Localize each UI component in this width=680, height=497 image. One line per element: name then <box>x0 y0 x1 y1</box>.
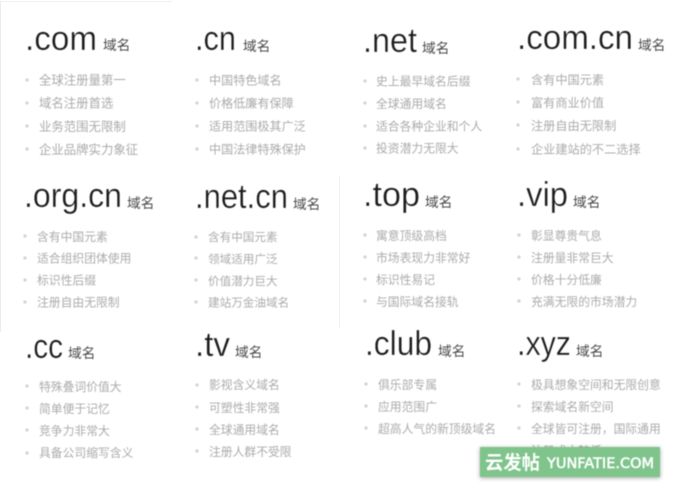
label: 域名: 域名 <box>293 197 320 212</box>
list: .com.cn features: 含有中国元素 <box>531 72 604 87</box>
heading: .xyz: .xyz <box>517 325 571 363</box>
list: .cc features: 简单便于记忆 <box>39 402 110 416</box>
list: .com.cn features: 注册自由无限制 <box>531 118 616 133</box>
panel: .cc <box>25 328 134 460</box>
label: 域名: 域名 <box>425 195 452 210</box>
heading: .tv: .tv <box>195 326 231 364</box>
panel: .org.cn <box>23 177 154 310</box>
heading: .org.cn: .org.cn <box>24 177 122 215</box>
list: .vip features: 彰显尊贵气息 <box>531 229 602 243</box>
list: .net.cn features: 价值潜力巨大 <box>208 274 278 288</box>
list: .top features: 标识性易记 <box>376 273 435 287</box>
heading: .net.cn: .net.cn <box>195 178 288 216</box>
list: .tv features: 全球通用域名 <box>209 423 280 437</box>
list: .com.cn features: 富有商业价值 <box>531 95 604 110</box>
panel: .net <box>363 22 482 156</box>
watermark badge <box>480 447 660 477</box>
list: .xyz features <box>517 378 661 458</box>
list: .xyz features: 注册成本较低 <box>531 444 602 458</box>
list: .tv features: 可塑性非常强 <box>209 401 280 415</box>
label: 域名: 域名 <box>438 344 465 359</box>
heading: .com.cn: .com.cn <box>517 19 633 57</box>
heading: .net: .net <box>363 22 417 60</box>
list: .top features <box>363 229 471 309</box>
watermark badge: 云发帖 <box>485 448 540 475</box>
list: .org.cn features: 含有中国元素 <box>37 230 108 244</box>
heading: .cc: .cc <box>25 328 63 366</box>
list: .com features: 全球注册量第一 <box>39 72 126 88</box>
list: .com features <box>25 72 138 157</box>
list: .club features: 应用范围广 <box>378 400 437 414</box>
panel: .cn <box>195 20 306 156</box>
list: .net.cn features: 建站万金油域名 <box>208 296 289 310</box>
list: .vip features: 价格十分低廉 <box>531 273 602 287</box>
list: .com features: 企业品牌实力象征 <box>39 142 138 157</box>
panel: .club <box>364 325 496 436</box>
list: .club features: 俱乐部专属 <box>378 378 437 392</box>
list: .vip features: 充满无限的市场潜力 <box>531 295 637 309</box>
list: .org.cn features: 适合组织团体使用 <box>37 252 131 266</box>
list: .net features: 全球通用域名 <box>376 97 447 111</box>
list: .org.cn features: 标识性后缀 <box>37 274 96 288</box>
list: .top features: 市场表现力非常好 <box>376 251 471 265</box>
panel: .com <box>25 20 138 157</box>
list: .top features: 寓意顶级高档 <box>376 229 447 243</box>
list: .cn features: 中国法律特殊保护 <box>209 142 306 156</box>
heading: .club: .club <box>365 325 432 363</box>
list: .net.cn features: 领域适用广泛 <box>208 253 278 266</box>
list: .cn features: 价格低廉有保障 <box>209 96 294 110</box>
list: .com features: 域名注册首选 <box>39 96 113 110</box>
label: 域名: 域名 <box>573 195 600 210</box>
list: .cc features: 具备公司缩写含义 <box>39 446 134 460</box>
heading: .vip: .vip <box>517 176 568 214</box>
list: .org.cn features: 注册自由无限制 <box>37 296 120 310</box>
panel: .vip <box>517 176 637 309</box>
list: .vip features: 注册量非常巨大 <box>531 251 614 265</box>
list: .net.cn features: 含有中国元素 <box>208 230 278 244</box>
list: .com.cn features <box>516 72 641 156</box>
list: .net features: 适合各种企业和个人 <box>376 120 482 134</box>
list: .club features: 超高人气的新顶级域名 <box>378 422 496 436</box>
panel: .tv <box>195 326 292 459</box>
label: 域名: 域名 <box>68 346 95 361</box>
panel: .xyz <box>517 325 661 458</box>
list: .org.cn features <box>23 230 131 310</box>
list: .cn features: 适用范围极其广泛 <box>209 120 306 134</box>
label: 域名: 域名 <box>103 38 130 53</box>
list: .net features: 史上最早域名后缀 <box>376 74 471 88</box>
list: .cc features: 特殊叠词价值大 <box>39 380 122 394</box>
list: .cc features: 竞争力非常大 <box>39 424 110 438</box>
list: .cn features: 中国特色域名 <box>209 72 282 88</box>
panel: .net.cn <box>194 178 320 310</box>
heading: .cn: .cn <box>195 20 236 58</box>
label: 域名: 域名 <box>422 41 449 56</box>
list: .net features: 投资潜力无限大 <box>376 142 459 156</box>
list: .com.cn features: 企业建站的不二选择 <box>531 142 641 156</box>
list: .xyz features: 极具想象空间和无限创意 <box>531 378 661 392</box>
list: .tv features: 注册人群不受限 <box>209 445 292 459</box>
list: .cc features <box>25 380 134 460</box>
heading: .com: .com <box>25 20 97 58</box>
list: .tv features: 影视含义域名 <box>209 378 280 392</box>
label: 域名: 域名 <box>235 345 262 360</box>
list: .tv features <box>195 378 292 459</box>
label: 域名: 域名 <box>243 39 270 54</box>
list: .com features: 业务范围无限制 <box>39 119 126 134</box>
list: .club features <box>364 378 496 436</box>
label: 域名: 域名 <box>127 196 154 211</box>
list: .vip features <box>517 229 637 309</box>
list: .net.cn features <box>194 230 289 310</box>
list: .net features <box>363 74 482 156</box>
heading: .top: .top <box>363 176 420 214</box>
panel: .com.cn <box>516 19 665 156</box>
list: .top features: 与国际域名接轨 <box>376 295 459 309</box>
label: 域名: 域名 <box>638 38 665 53</box>
list: .xyz features: 探索域名新空间 <box>531 400 614 414</box>
list: .cn features <box>195 72 306 156</box>
label: 域名: 域名 <box>576 344 603 359</box>
panel: .top <box>363 176 471 309</box>
list: .xyz features: 全球皆可注册，国际通用 <box>531 422 661 436</box>
watermark badge: YUNFATIE.COM <box>546 456 654 472</box>
